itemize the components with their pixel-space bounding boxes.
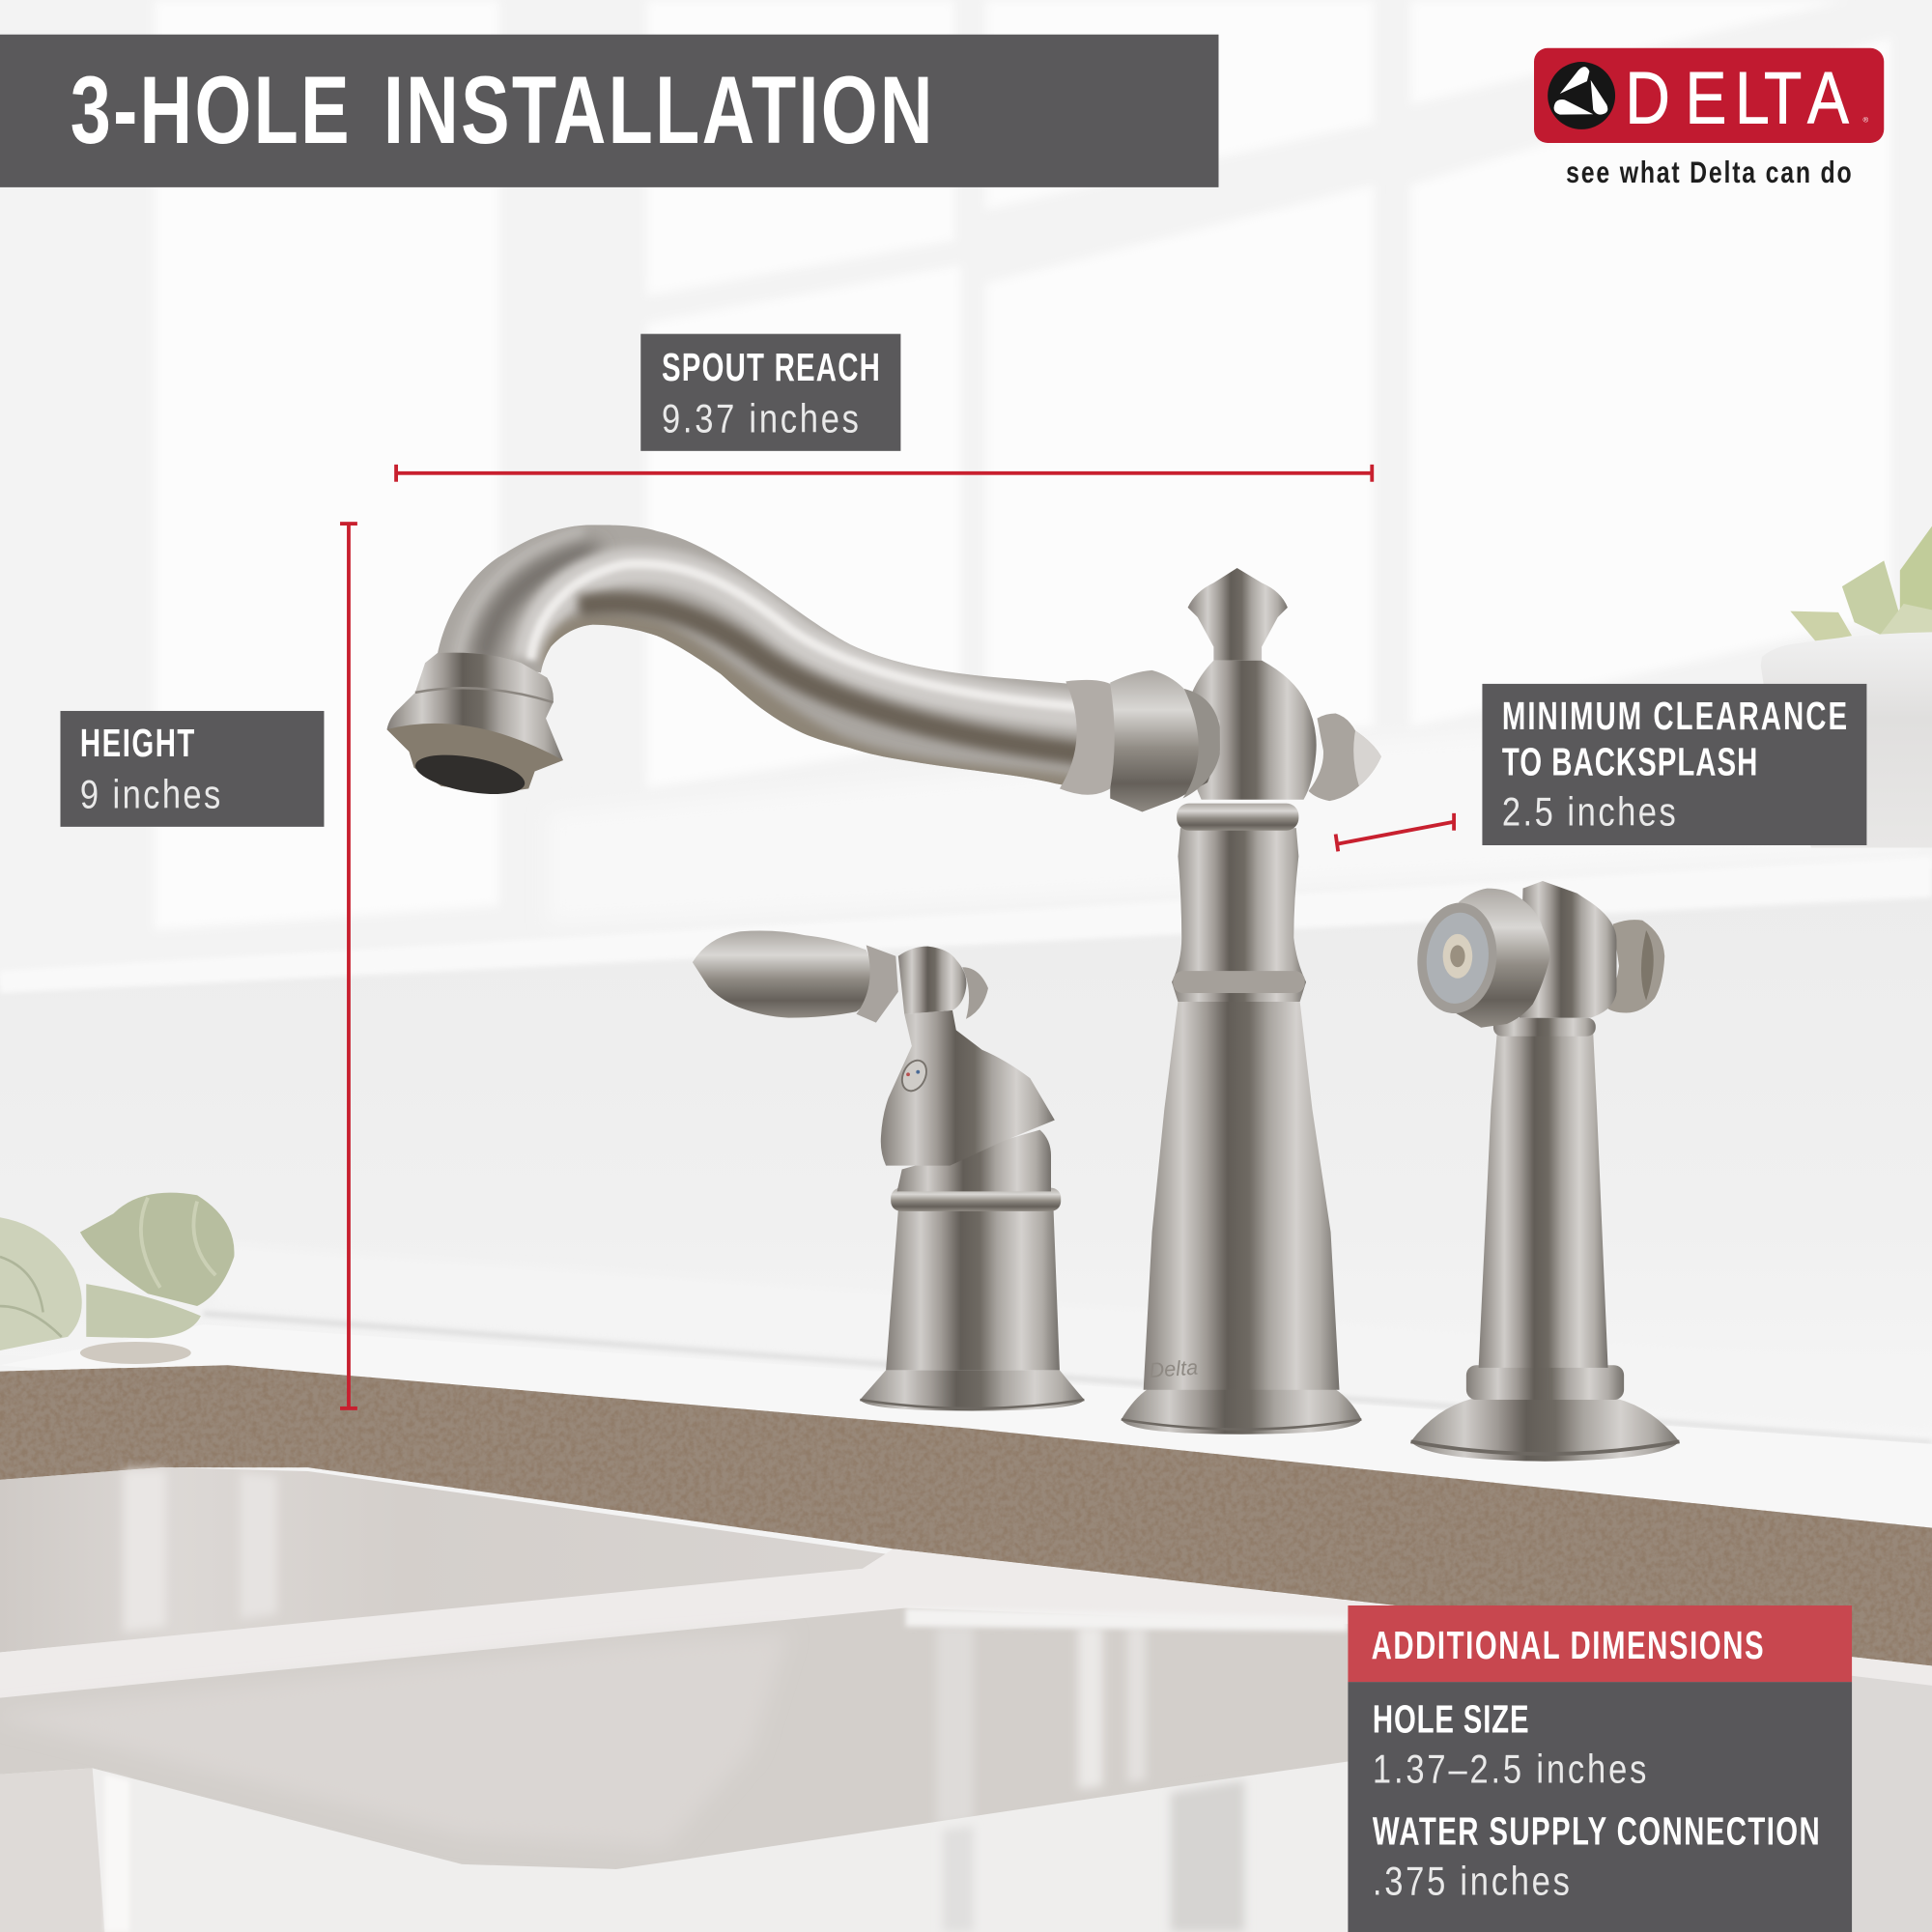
valve body xyxy=(886,1210,1060,1370)
water supply connection: WATER SUPPLY CONNECTION xyxy=(1373,1809,1820,1854)
sprayer ball xyxy=(1520,881,1616,1018)
aerator xyxy=(387,653,563,793)
column upper body xyxy=(1172,828,1306,1002)
sprayer stem xyxy=(1479,1033,1608,1368)
main faucet column: Delta xyxy=(1149,1355,1199,1382)
potted plant decoration xyxy=(1761,526,1932,848)
finial xyxy=(1188,568,1288,661)
minimum clearance callout: TO BACKSPLASH xyxy=(1502,740,1757,783)
panel header xyxy=(1348,1605,1852,1682)
spout reach callout xyxy=(640,334,900,451)
valve base xyxy=(860,1370,1084,1410)
lever handle xyxy=(693,931,882,1018)
artichoke decoration xyxy=(0,1193,234,1364)
column lower body xyxy=(1144,1002,1339,1390)
handle valve xyxy=(693,931,1084,1410)
Delta logo: ® xyxy=(1863,115,1869,124)
small knob xyxy=(962,967,988,1019)
title banner xyxy=(0,35,1218,187)
Delta logo xyxy=(1534,48,1884,190)
hub xyxy=(898,947,966,1014)
sprayer rear knob xyxy=(1605,920,1664,1012)
height callout: 9 inches xyxy=(80,773,220,818)
logo tagline: see what Delta can do xyxy=(1566,156,1852,190)
spout reach dimension line xyxy=(394,465,1374,482)
countertop granite edge xyxy=(0,1355,1932,1676)
title text: 3-HOLE INSTALLATION xyxy=(71,56,933,163)
spout reach callout: SPOUT REACH xyxy=(662,345,880,389)
Delta logo: DELTA xyxy=(1625,56,1849,139)
sink basins xyxy=(0,1467,1932,1932)
right knob xyxy=(1309,714,1381,801)
minimum clearance callout: MINIMUM CLEARANCE xyxy=(1502,694,1847,738)
valve dome xyxy=(881,1010,1055,1166)
side sprayer xyxy=(1410,881,1680,1462)
spout tube xyxy=(438,526,1077,784)
sprayer base xyxy=(1410,1399,1680,1462)
spout reach callout: 9.37 inches xyxy=(662,397,859,442)
lower basin reflection xyxy=(0,1761,1353,1932)
height callout xyxy=(60,711,324,827)
column base xyxy=(1122,1389,1361,1435)
sprayer head xyxy=(1455,889,1549,1028)
additional dimensions panel: .375 inches xyxy=(1373,1860,1570,1905)
height callout: HEIGHT xyxy=(80,721,195,765)
hub xyxy=(1185,661,1317,800)
main faucet column xyxy=(1122,804,1361,1435)
plant pot xyxy=(1761,632,1932,848)
front basin interior xyxy=(0,1608,1348,1932)
faucet hub and finial xyxy=(1185,568,1317,800)
additional dimensions panel: ADDITIONAL DIMENSIONS xyxy=(1372,1623,1764,1667)
additional dimensions panel xyxy=(1348,1605,1852,1932)
spout sleeve xyxy=(1110,670,1220,812)
clearance dimension line xyxy=(1336,813,1454,851)
minimum clearance callout: 2.5 inches xyxy=(1502,789,1676,835)
minimum clearance callout xyxy=(1482,684,1866,845)
height dimension line xyxy=(340,522,357,1410)
spout xyxy=(387,505,1220,812)
hole size: HOLE SIZE xyxy=(1373,1697,1529,1742)
additional dimensions panel: 1.37–2.5 inches xyxy=(1373,1747,1646,1793)
